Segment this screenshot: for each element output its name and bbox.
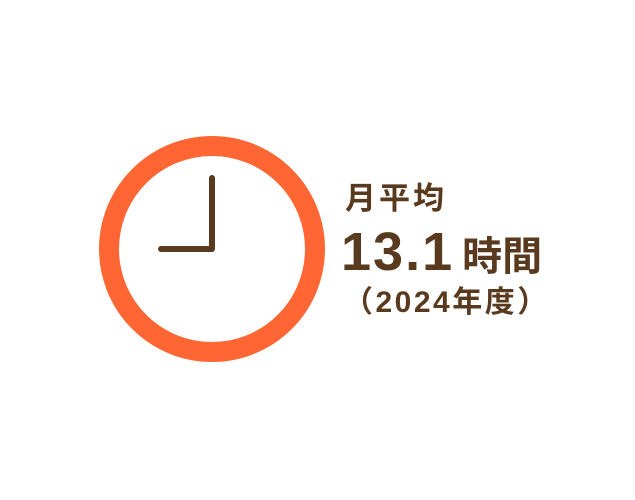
note: (2024年度): （2024年度） xyxy=(343,286,550,319)
value: 13.1時間: 13.1時間 xyxy=(341,222,542,282)
clock hands xyxy=(161,178,212,249)
label: 月平均: 月平均 xyxy=(345,181,447,216)
clock ring xyxy=(109,146,315,352)
